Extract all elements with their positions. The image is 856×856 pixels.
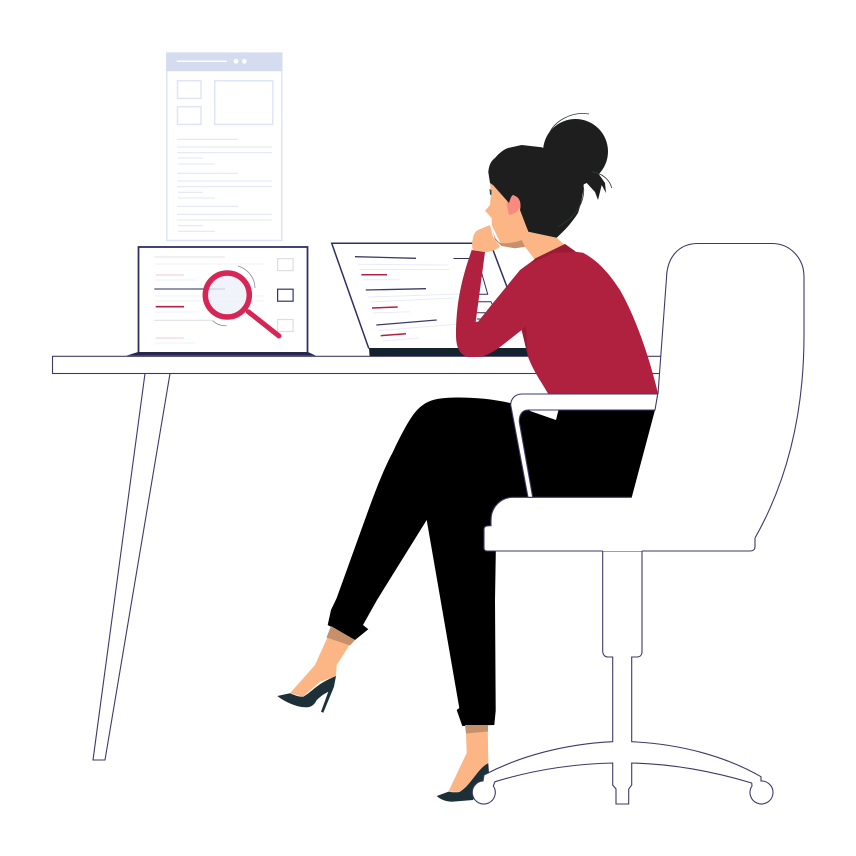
chair armrest xyxy=(511,394,658,497)
sweater shadow xyxy=(522,244,576,357)
trousers xyxy=(328,395,658,726)
hair xyxy=(488,113,612,238)
second laptop xyxy=(332,243,530,356)
front leg and shoe xyxy=(277,626,355,713)
back leg and shoe xyxy=(437,725,489,802)
chair back xyxy=(520,244,804,600)
chair seat and base xyxy=(472,497,773,804)
torso sweater xyxy=(456,244,658,394)
shirt hem xyxy=(528,408,559,420)
icon: magnifying glass xyxy=(205,266,279,336)
desk xyxy=(52,356,662,760)
head and neck xyxy=(485,183,570,260)
document page xyxy=(166,53,282,241)
laptop with magnifier xyxy=(126,247,316,356)
hand xyxy=(472,225,500,252)
